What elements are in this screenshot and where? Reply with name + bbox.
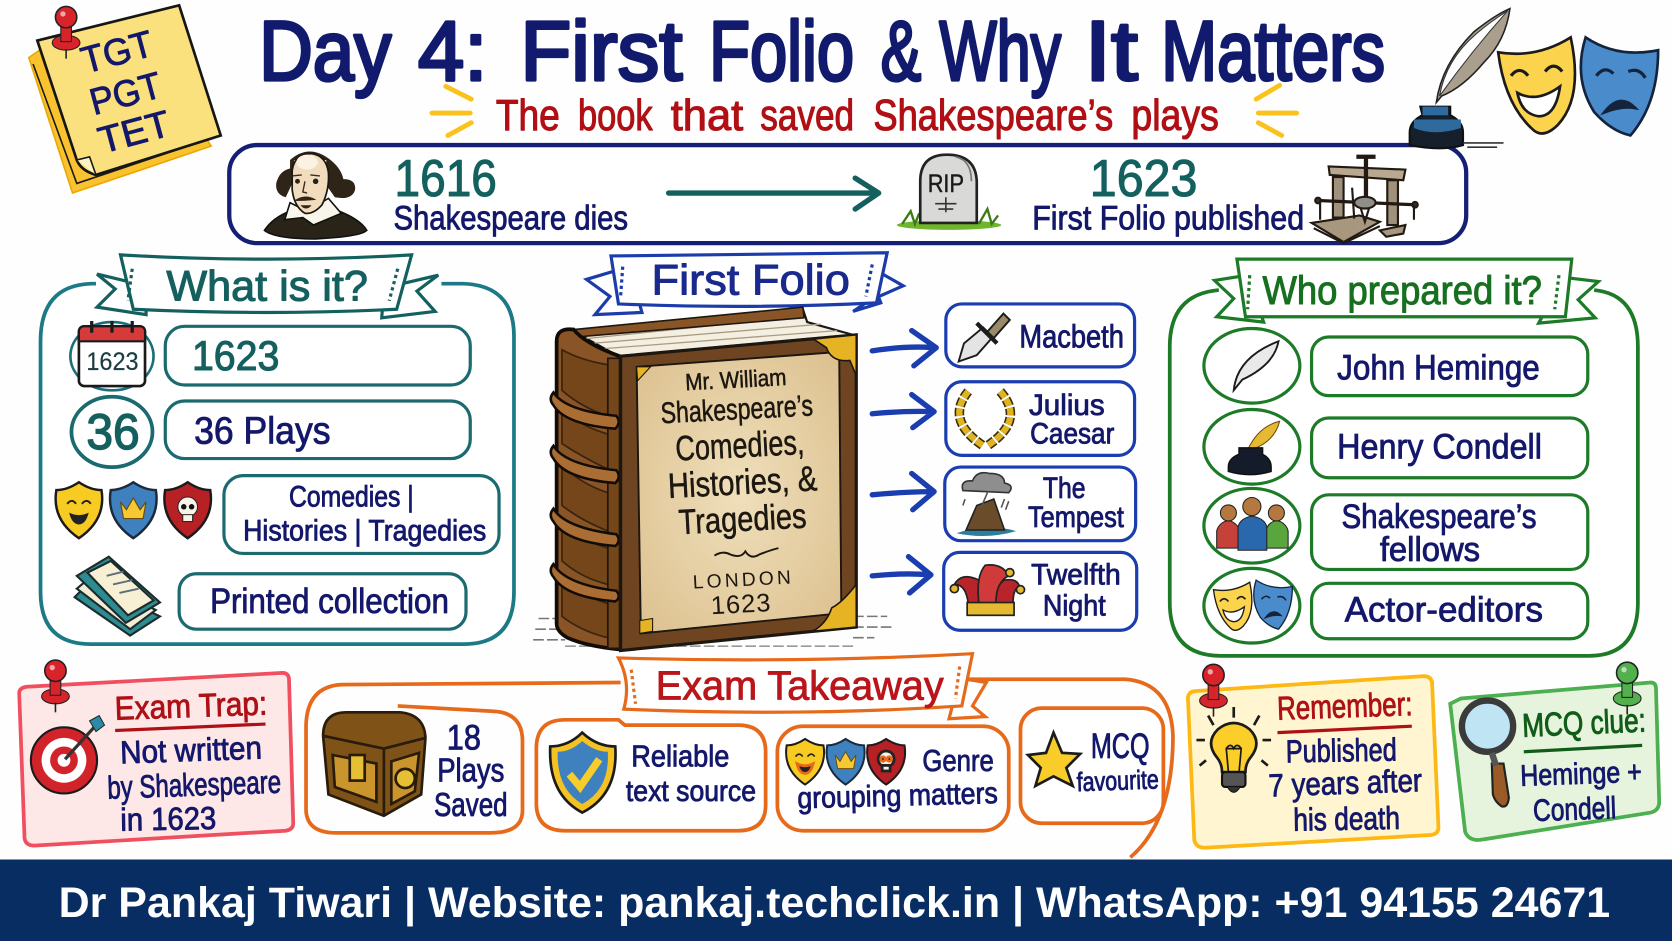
title: & [881, 4, 921, 98]
play card: Twelfth Night: Twelfth [1031, 558, 1121, 591]
label: First Folio published: First Folio published [1032, 199, 1304, 237]
card: Reliable text source: Reliable [631, 739, 729, 774]
icon: Shakespeare portrait [264, 151, 367, 239]
pin: red [1200, 664, 1227, 717]
row: 36 Plays [165, 401, 470, 459]
card: Reliable text source: text source [626, 775, 756, 808]
title page text: Shakespeare’s [660, 389, 814, 430]
icon: three shields [786, 739, 905, 785]
arrow: to The Tempest [872, 473, 934, 510]
footer bar [0, 859, 1672, 941]
footer bar: Dr Pankaj Tiwari | Website: pankaj.techclick.in | WhatsApp: +91 94155 24671 [59, 879, 1610, 927]
stat: 18 Plays Saved: Saved [434, 787, 508, 824]
title: Matters [1161, 4, 1385, 98]
subtitle [432, 85, 1297, 140]
icon: quill and inkwell [1410, 9, 1510, 148]
callout: Exam Trap [19, 660, 293, 846]
card: MCQ favourite: favourite [1076, 764, 1159, 797]
row: genres: Comedies | [289, 481, 414, 514]
play card: Twelfth Night [944, 552, 1137, 630]
date: 1623: 1623 [1090, 150, 1197, 208]
play card: Twelfth Night: Night [1043, 589, 1106, 622]
row: John Heminge [1312, 337, 1588, 396]
icon: book stack [75, 557, 160, 636]
panel: timeline [229, 145, 1466, 243]
callout: MCQ clue [1450, 662, 1659, 840]
title [259, 4, 1385, 98]
play card: Julius Caesar: Julius [1029, 389, 1105, 422]
stat: 18 Plays Saved [434, 719, 508, 824]
banner: Who prepared it? [1215, 259, 1598, 323]
icon: gravestone: RIP [928, 171, 964, 198]
row: Actor-editors: Actor-editors [1345, 591, 1543, 630]
title: 4: [418, 4, 487, 98]
title: Why [939, 4, 1061, 98]
icon: feather [1204, 328, 1300, 403]
callout: Remember: 7 years after [1268, 762, 1423, 804]
pin: green [1613, 662, 1641, 714]
icon: laurel wreath [959, 391, 1010, 446]
title page text: 1623 [710, 589, 771, 620]
subtitle: saved [760, 91, 854, 140]
panel: Exam Takeaway [306, 654, 1173, 857]
play card: Julius Caesar [946, 382, 1135, 455]
icon: genre shields [56, 482, 211, 538]
callout: Exam Trap: by Shakespeare [107, 764, 282, 806]
arrow: to 1623 [669, 178, 879, 209]
row: Printed collection [179, 574, 466, 629]
arrow: to Macbeth [872, 331, 936, 366]
row: 36 Plays: 36 Plays [194, 410, 331, 453]
brass corners [814, 335, 856, 375]
panel: What is it? [41, 255, 514, 644]
icon: treasure chest [323, 712, 425, 816]
subtitle: plays [1131, 91, 1219, 140]
icon: light bulb [1196, 707, 1271, 792]
sticky note: TGT PGT TET [29, 5, 221, 193]
row: Shakespeare's fellows: Shakespeare’s [1341, 498, 1537, 536]
pages [576, 309, 853, 356]
row: Henry Condell: Henry Condell [1337, 428, 1542, 467]
card: Genre grouping matters [777, 726, 1009, 831]
icon: star [1028, 733, 1080, 786]
parchment [637, 352, 841, 633]
icon: printing press [1312, 157, 1418, 243]
icon: calendar 1623: 1623 [86, 349, 139, 376]
icon: magnifier [1462, 701, 1513, 807]
play card: Macbeth: Macbeth [1019, 319, 1124, 355]
banner: First Folio [586, 253, 903, 315]
row: Henry Condell [1312, 418, 1588, 478]
card: MCQ favourite [1020, 708, 1163, 823]
book: First Folio [533, 307, 894, 650]
label: Shakespeare dies: Shakespeare dies [393, 199, 628, 237]
play card: Julius Caesar: Caesar [1030, 418, 1114, 451]
icon: 36 badge: 36 [86, 404, 140, 460]
title page text: LONDON [692, 568, 791, 594]
banner: What is it? [97, 255, 438, 318]
row: Printed collection: Printed collection [210, 582, 449, 621]
icon: storm over rock [956, 473, 1016, 536]
panel: Who prepared it? [1170, 259, 1638, 656]
card: Reliable text source [536, 720, 766, 831]
card: Genre grouping matters: Genre [922, 743, 994, 778]
play card: The Tempest [945, 467, 1136, 541]
title: Folio [709, 4, 854, 98]
play card: The Tempest: The [1043, 472, 1086, 505]
icon: jester hat [950, 565, 1025, 615]
callout: Remember: Published [1285, 732, 1397, 769]
banner: Exam Takeaway [618, 654, 986, 719]
icon: 36 badge [71, 397, 152, 467]
row: genres [224, 476, 499, 553]
stat: 18 Plays Saved: Plays [437, 753, 504, 790]
icon: calendar 1623 [70, 321, 154, 390]
cover [621, 335, 856, 650]
callout: Remember: his death [1293, 800, 1400, 838]
card: Genre grouping matters: grouping matters [797, 777, 998, 815]
title: Day [259, 4, 391, 98]
pin: red [42, 660, 69, 712]
icon: gravestone [897, 155, 1001, 230]
row: genres: Histories | Tragedies [243, 515, 486, 548]
row: Actor-editors [1312, 583, 1588, 639]
banner: Exam Takeaway: Exam Takeaway [656, 663, 944, 709]
icon: check shield [550, 733, 616, 813]
icon: masks [1204, 568, 1300, 643]
icon: inkwell [1204, 410, 1300, 484]
row: 1623 [165, 326, 470, 385]
callout: Remember: Remember: [1276, 686, 1413, 728]
date: 1616: 1616 [395, 150, 497, 208]
row: John Heminge: John Heminge [1337, 349, 1540, 388]
play card: The Tempest: Tempest [1028, 501, 1125, 534]
callout: Remember [1188, 664, 1438, 848]
title: First [520, 4, 682, 98]
row: Shakespeare's fellows [1312, 495, 1588, 569]
arrow: to Julius Caesar [872, 395, 934, 428]
callout: Exam Trap: in 1623 [120, 800, 217, 838]
icon: group of fellows [1204, 488, 1300, 563]
pin: red [52, 6, 80, 59]
spine [557, 329, 620, 649]
icon: theatre masks [1498, 37, 1658, 135]
row: 1623: 1623 [192, 332, 279, 379]
subtitle: book [578, 91, 653, 140]
row: Shakespeare's fellows: fellows [1380, 531, 1480, 569]
callout: MCQ clue: Heminge + [1520, 756, 1642, 793]
spine bands [551, 392, 619, 601]
sticky note: TGT PGT TET: TGT [77, 22, 157, 81]
stat: 18 Plays Saved: 18 [447, 719, 481, 758]
title page text: Mr. William [685, 364, 787, 395]
banner: Who prepared it?: Who prepared it? [1263, 269, 1542, 313]
title: It [1084, 4, 1138, 98]
title page text [660, 364, 818, 620]
banner: First Folio: First Folio [652, 256, 850, 304]
play card: Macbeth [946, 304, 1135, 367]
subtitle: The [496, 91, 560, 140]
title page text: Comedies, [674, 423, 805, 469]
banner: What is it?: What is it? [166, 263, 368, 311]
callout: MCQ clue: Condell [1532, 790, 1617, 828]
sticky note: TGT PGT TET: PGT [85, 64, 166, 123]
callout: Exam Trap: Not written [119, 730, 262, 771]
subtitle: that [671, 91, 743, 140]
arrow: to Twelfth Night [872, 557, 931, 593]
icon: target [31, 716, 104, 793]
title page text: Histories, & [667, 459, 818, 506]
callout: Exam Trap: Exam Trap: [114, 686, 268, 728]
icon: dagger [959, 314, 1010, 362]
subtitle: Shakespeare’s [873, 91, 1113, 140]
title page text: Tragedies [678, 497, 807, 542]
sticky note: TGT PGT TET: TET [94, 102, 174, 161]
card: MCQ favourite: MCQ [1091, 727, 1150, 766]
